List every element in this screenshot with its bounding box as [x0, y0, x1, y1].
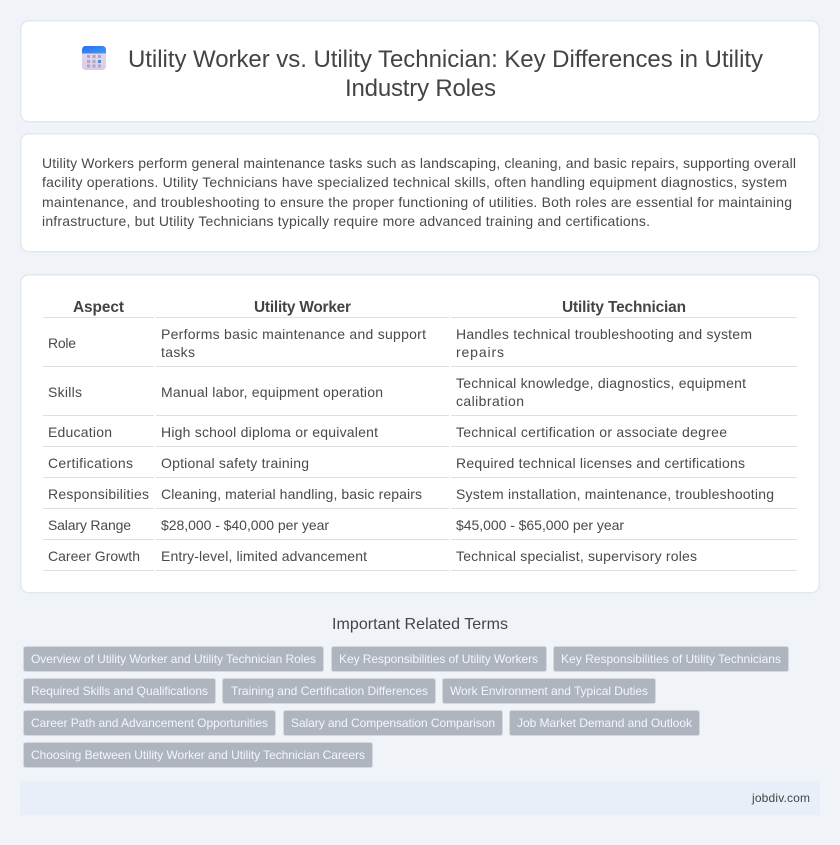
related terms tags: Work Environment and Typical Duties [450, 684, 648, 698]
row: education [48, 424, 727, 440]
summary text: infrastructure, but Utility Technicians typically require more advanced training and certifications. [42, 213, 650, 229]
related terms heading: Important Related Terms [332, 616, 508, 633]
row: role: repairs [456, 344, 504, 360]
related terms tags: Training and Certification Differences [231, 684, 428, 698]
row: career growth: Entry-level, limited advancement [161, 548, 367, 564]
row: responsibilities: Cleaning, material handling, basic repairs [161, 486, 422, 502]
title: Industry Roles [345, 75, 496, 102]
row: salary range [48, 517, 624, 533]
summary text: facility operations. Utility Technicians have specialized technical skills, often handling equipment diagnostics, system [42, 174, 787, 190]
related terms tags: Choosing Between Utility Worker and Utility Technician Careers [31, 748, 365, 762]
footer: jobdiv.com [751, 791, 810, 805]
row: certifications: Optional safety training [161, 455, 309, 471]
header panel [21, 21, 819, 122]
related terms tags: Required Skills and Qualifications [31, 684, 208, 698]
row: role: Performs basic maintenance and support [161, 326, 426, 342]
row: skills: Technical knowledge, diagnostics, equipment [456, 375, 746, 391]
summary text [42, 155, 796, 229]
table header: Aspect [73, 299, 124, 316]
row: education: Technical certification or associate degree [456, 424, 727, 440]
row: salary range: $28,000 - $40,000 per year [161, 517, 329, 533]
row: responsibilities: System installation, maintenance, troubleshooting [456, 486, 774, 502]
row: skills: calibration [456, 393, 524, 409]
row: skills [48, 375, 746, 409]
related terms tags [24, 646, 788, 768]
row: role: tasks [161, 344, 195, 360]
row: skills: Manual labor, equipment operation [161, 384, 383, 400]
row: career growth: Career Growth [48, 548, 140, 564]
row: responsibilities: Responsibilities [48, 486, 149, 502]
row: education: Education [48, 424, 112, 440]
row: role [48, 326, 752, 360]
table header [73, 299, 686, 316]
panel: summary [21, 134, 819, 252]
summary text: Utility Workers perform general maintenance tasks such as landscaping, cleaning, and basic repairs, supporting overall [42, 155, 796, 171]
row: certifications: Required technical licenses and certifications [456, 455, 745, 471]
row: salary range: Salary Range [48, 517, 131, 533]
row: skills: Skills [48, 384, 82, 400]
row: role: Handles technical troubleshooting and system [456, 326, 752, 342]
row: education: High school diploma or equivalent [161, 424, 378, 440]
table header: Utility Technician [562, 299, 686, 316]
row: role: Role [48, 335, 76, 351]
related terms tags: Key Responsibilities of Utility Technicians [561, 652, 781, 666]
row: salary range: $45,000 - $65,000 per year [456, 517, 624, 533]
row: certifications [48, 455, 745, 471]
related terms tags: Overview of Utility Worker and Utility Technician Roles [31, 652, 316, 666]
row: career growth [48, 548, 697, 564]
table header: Utility Worker [254, 299, 351, 316]
footer [20, 781, 820, 815]
related terms tags: Career Path and Advancement Opportunities [31, 716, 268, 730]
row: certifications: Certifications [48, 455, 133, 471]
row: responsibilities [48, 486, 774, 502]
row: career growth: Technical specialist, supervisory roles [456, 548, 697, 564]
panel: comparison table [21, 275, 819, 593]
icon: calendar [82, 46, 106, 70]
related terms tags: Key Responsibilities of Utility Workers [339, 652, 538, 666]
summary text: maintenance, and troubleshooting to ensure the proper functioning of utilities. Both roles are essential for maintaining [42, 194, 792, 210]
related terms tags: Job Market Demand and Outlook [517, 716, 693, 730]
title: Utility Worker vs. Utility Technician: Key Differences in Utility [128, 46, 763, 73]
title [128, 46, 763, 102]
related terms tags: Salary and Compensation Comparison [291, 716, 495, 730]
